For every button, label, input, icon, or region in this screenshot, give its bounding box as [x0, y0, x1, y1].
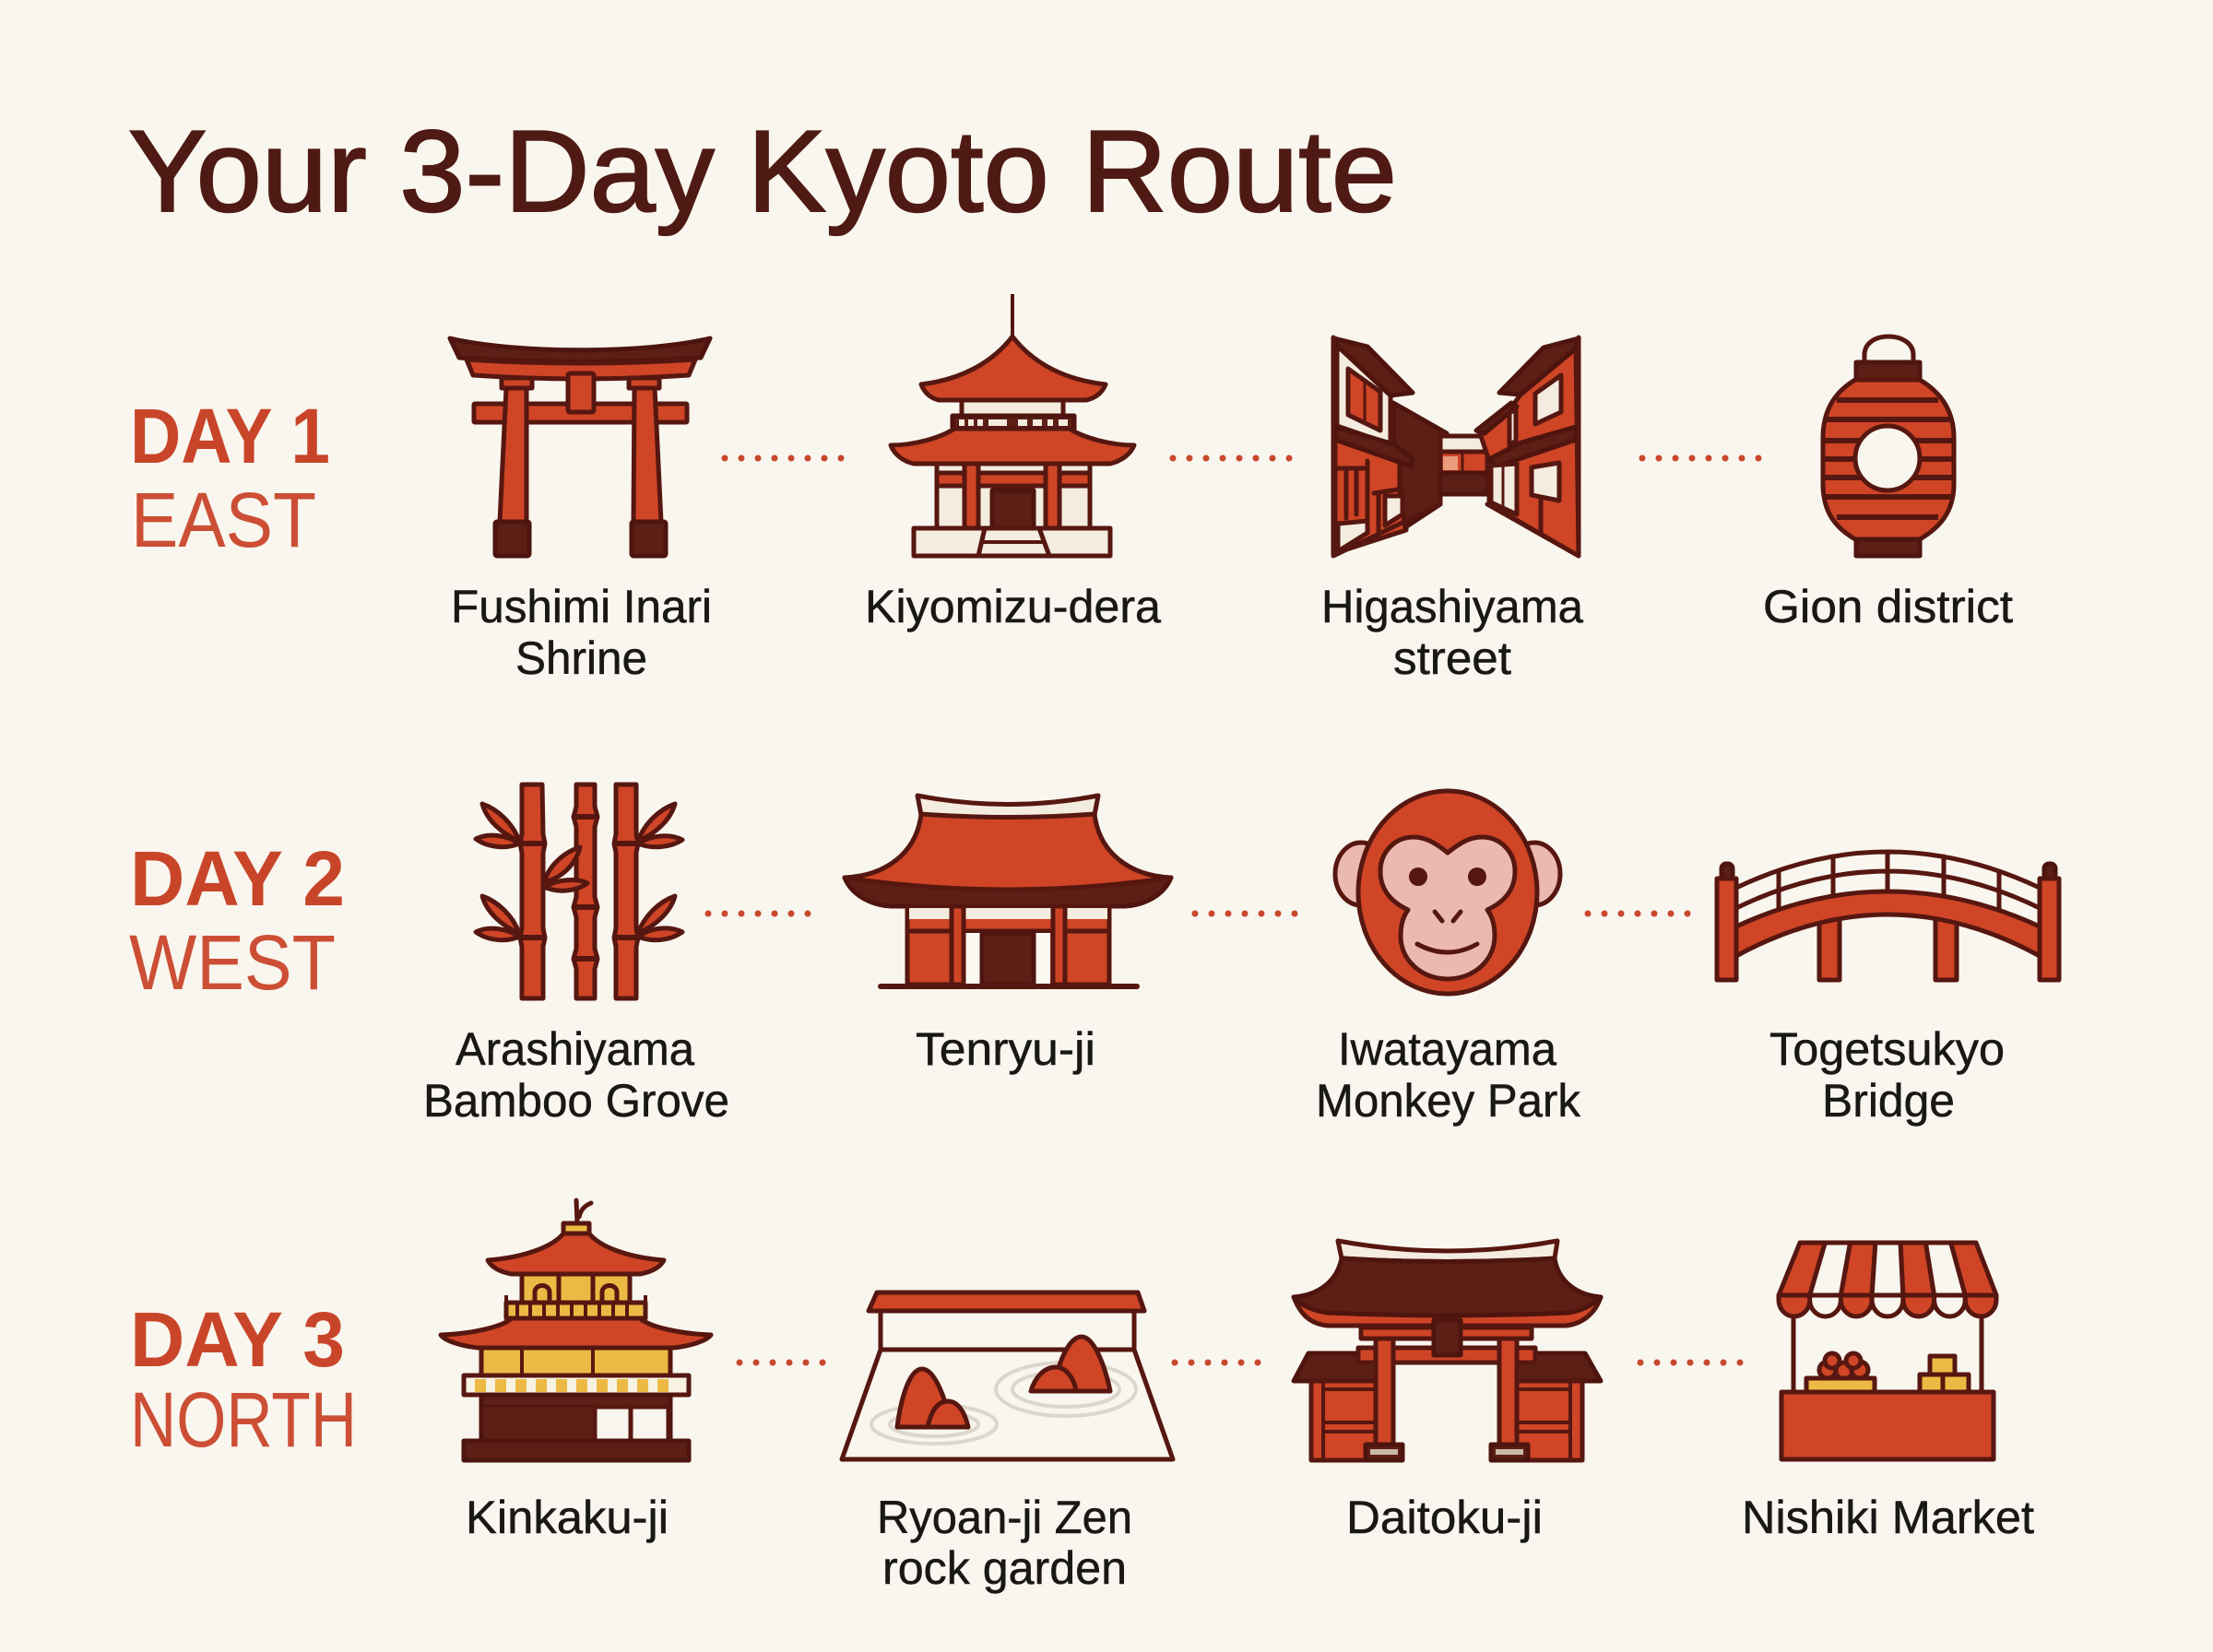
day heading: day 2 west: WEST	[129, 919, 336, 1006]
icon: Ryoan-ji rock garden	[842, 1292, 1173, 1459]
icon: Kiyomizu-dera temple	[891, 294, 1134, 556]
label: Fushimi Inari Shrine	[451, 581, 712, 684]
icon: paper lantern	[1823, 336, 1954, 556]
route connector: Daitoku-ji to Nishiki Market	[1640, 1359, 1741, 1366]
route connector: Tenryu-ji to monkey park	[1195, 911, 1296, 916]
icon: Togetsukyo arched bridge	[1717, 852, 2059, 980]
label: Kiyomizu-dera: Kiyomizu-dera	[865, 581, 1161, 632]
label: Nishiki Market: Nishiki Market	[1742, 1492, 2034, 1543]
label: Ryoan-ji Zen rock garden: Ryoan-ji Zen	[877, 1492, 1132, 1543]
route connector: torii to Kiyomizu	[725, 455, 842, 461]
icon: monkey face	[1335, 791, 1560, 994]
icon: Nishiki market stall	[1779, 1243, 1996, 1459]
day heading: day 3 north	[130, 1296, 357, 1463]
route connector: Higashiyama to Gion	[1642, 455, 1759, 461]
panel: day 2 west	[129, 785, 2059, 1127]
label: Higashiyama street	[1321, 581, 1583, 684]
label: Togetsukyo Bridge: Bridge	[1822, 1075, 1955, 1127]
label: Fushimi Inari Shrine: Fushimi Inari	[451, 581, 712, 632]
label: Togetsukyo Bridge	[1769, 1023, 2005, 1127]
label: Ryoan-ji Zen rock garden	[877, 1492, 1132, 1594]
label: Arashiyama Bamboo Grove: Bamboo Grove	[423, 1075, 729, 1127]
label: Arashiyama Bamboo Grove: Arashiyama	[456, 1023, 694, 1075]
label: Gion district: Gion district	[1763, 581, 2013, 632]
route connector: Ryoan-ji to Daitoku-ji	[1175, 1359, 1259, 1366]
label: Higashiyama street: Higashiyama	[1321, 581, 1583, 632]
title: Your 3-Day Kyoto Route	[128, 106, 1397, 236]
label: Iwatayama Monkey Park	[1316, 1023, 1581, 1127]
label: Tenryu-ji: Tenryu-ji	[916, 1023, 1095, 1075]
label: Iwatayama Monkey Park: Iwatayama	[1338, 1023, 1556, 1075]
icon: Higashiyama street	[1333, 337, 1579, 556]
label: Kinkaku-ji: Kinkaku-ji	[466, 1492, 669, 1543]
day heading: day 1 east: DAY 1	[130, 393, 330, 479]
panel: day 1 east	[130, 294, 2013, 684]
route connector: Kinkaku-ji to Ryoan-ji	[740, 1359, 823, 1366]
icon: bamboo grove	[476, 785, 682, 998]
icon: torii gate	[450, 338, 710, 556]
label: Fushimi Inari Shrine: Shrine	[515, 632, 647, 684]
icon: Kinkaku-ji golden pavilion	[441, 1200, 711, 1460]
panel: day 3 north	[130, 1200, 2034, 1594]
day heading: day 1 east	[130, 393, 330, 563]
label: Arashiyama Bamboo Grove	[423, 1023, 729, 1127]
label: Togetsukyo Bridge: Togetsukyo	[1769, 1023, 2005, 1075]
day heading: day 3 north: DAY 3	[130, 1296, 345, 1383]
label: Daitoku-ji: Daitoku-ji	[1346, 1492, 1543, 1543]
day heading: day 2 west: DAY 2	[130, 835, 345, 922]
label: Ryoan-ji Zen rock garden: rock garden	[882, 1542, 1127, 1594]
icon: Daitoku-ji gate	[1294, 1241, 1601, 1460]
route connector: Kiyomizu to Higashiyama	[1173, 455, 1290, 461]
icon: Tenryu-ji temple	[845, 796, 1171, 986]
day heading: day 3 north: NORTH	[130, 1376, 357, 1463]
route connector: bamboo to Tenryu-ji	[708, 911, 809, 916]
route connector: monkey park to bridge	[1588, 911, 1688, 916]
day heading: day 1 east: EAST	[131, 477, 316, 563]
label: Higashiyama street: street	[1393, 632, 1511, 684]
day heading: day 2 west	[129, 835, 345, 1006]
label: Iwatayama Monkey Park: Monkey Park	[1316, 1075, 1581, 1127]
